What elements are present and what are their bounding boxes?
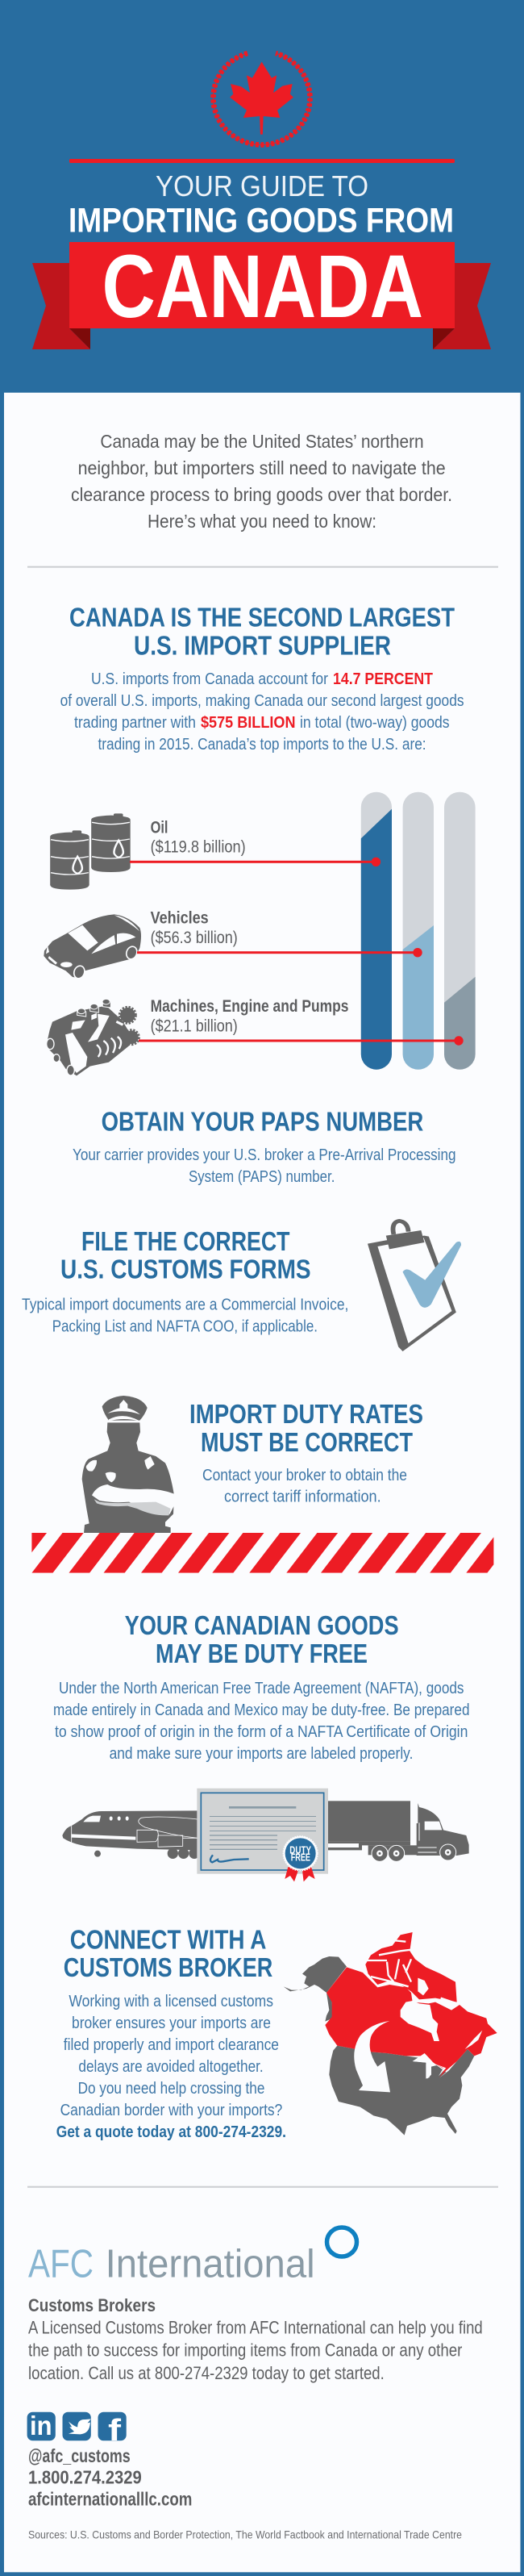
heading: customs forms bbox=[60, 1227, 311, 1285]
text block: introduction: neighbor, but importers still need to navigate the bbox=[78, 457, 446, 478]
panel: header bbox=[32, 53, 491, 349]
panel: duty rates bbox=[31, 1396, 493, 1573]
panel: customs forms bbox=[22, 1221, 461, 1351]
map: north america bbox=[284, 1932, 497, 2136]
heading: customs broker bbox=[64, 1925, 272, 1983]
leader line: vehicles bbox=[137, 948, 422, 957]
text block: introduction: clearance process to bring goods over that border. bbox=[71, 484, 452, 505]
label: machines bbox=[151, 997, 348, 1035]
text block: customs broker: Do you need help crossing the bbox=[78, 2079, 264, 2098]
icon: maple leaf with wreath bbox=[214, 53, 310, 144]
text block: customs broker: Canadian border with your imports? bbox=[60, 2101, 282, 2119]
panel: customs broker bbox=[56, 1925, 497, 2141]
hazard stripe band bbox=[31, 1533, 493, 1573]
text block: import statistics: in total (two-way) goods bbox=[300, 713, 450, 732]
text block: introduction: Canada may be the United States’ northern bbox=[100, 431, 424, 452]
red rule bbox=[69, 159, 455, 163]
text block: contact details: @afc_customs bbox=[28, 2445, 131, 2466]
text block: contact details: afcinternationalllc.com bbox=[28, 2489, 192, 2510]
text block: NAFTA bbox=[53, 1679, 469, 1763]
text block: customs broker: filed properly and import clearance bbox=[64, 2035, 279, 2054]
chart: top imports bars bbox=[44, 792, 476, 1075]
text block: introduction bbox=[71, 431, 452, 532]
heading: duty free bbox=[125, 1611, 399, 1669]
text block: import statistics: of overall U.S. imports, making Canada our second largest goods bbox=[60, 691, 464, 710]
text block: customs broker: delays are avoided altogether. bbox=[78, 2057, 264, 2076]
text block: customs forms: Packing List and NAFTA COO, if applicable. bbox=[52, 1317, 318, 1335]
icon: airplane bbox=[62, 1810, 200, 1859]
label: oil bbox=[151, 819, 246, 857]
text block: import statistics: U.S. imports from Canada account for bbox=[91, 670, 328, 688]
icon: linkedin: in bbox=[30, 2411, 52, 2440]
panel: footer bbox=[27, 2227, 483, 2541]
map: alaska bbox=[284, 1956, 347, 2022]
label: vehicles bbox=[151, 909, 238, 947]
text block: duty rates: correct tariff information. bbox=[224, 1488, 381, 1506]
leader line: machines bbox=[139, 1036, 464, 1046]
text block: import statistics: $575 BILLION bbox=[201, 713, 295, 732]
bar: machines bbox=[444, 792, 476, 1070]
logo: AFC International: International bbox=[106, 2243, 315, 2286]
text block: customs forms: Typical import documents are a Commercial Invoice, bbox=[22, 1295, 348, 1313]
icon: facebook: f bbox=[108, 2414, 121, 2448]
text block: customs broker: Get a quote today at 800-274-2329. bbox=[56, 2123, 286, 2141]
text block: NAFTA: to show proof of origin in the form of a NAFTA Certificate of Origin bbox=[55, 1722, 468, 1741]
text block: PAPS: System (PAPS) number. bbox=[189, 1167, 335, 1186]
text block: customs broker bbox=[56, 1992, 286, 2141]
heading: duty rates: IMPORT DUTY RATES bbox=[189, 1400, 423, 1430]
icon: customs officer bbox=[82, 1396, 176, 1533]
icon: facebook bbox=[98, 2412, 127, 2448]
text block: introduction: Here’s what you need to know: bbox=[148, 511, 376, 532]
text block: customs broker: broker ensures your imports are bbox=[72, 2014, 271, 2032]
icon: certificate with seal bbox=[197, 1789, 328, 1881]
text block: about: location. Call us at 800-274-2329 today to get started. bbox=[28, 2363, 385, 2383]
leader line: oil bbox=[130, 858, 381, 866]
icon: oil barrels bbox=[50, 813, 131, 890]
logo: AFC International: AFC bbox=[28, 2243, 94, 2286]
icon: truck bbox=[328, 1801, 469, 1861]
text block: import statistics bbox=[60, 670, 464, 754]
label: machines: Machines, Engine and Pumps bbox=[151, 997, 348, 1016]
map: canada bbox=[325, 1932, 497, 2079]
sources: Sources: U.S. Customs and Border Protection, The World Factbook and International Trade Centre bbox=[28, 2528, 462, 2541]
text block: import statistics: trading partner with bbox=[74, 713, 196, 732]
icon: car bbox=[44, 914, 141, 980]
panel: duty free bbox=[53, 1611, 469, 1881]
text block: customs forms bbox=[22, 1295, 348, 1335]
seal text bbox=[289, 1843, 311, 1864]
map: united states bbox=[329, 2046, 474, 2136]
text block: import statistics: 14.7 PERCENT bbox=[333, 670, 433, 688]
heading: PAPS: OBTAIN YOUR PAPS NUMBER bbox=[102, 1108, 423, 1138]
title: canada: CANADA bbox=[102, 237, 423, 336]
heading: duty free: MAY BE DUTY FREE bbox=[156, 1639, 368, 1669]
title: importing goods from: IMPORTING GOODS FROM bbox=[69, 201, 454, 240]
text block: about bbox=[28, 2295, 483, 2383]
label: oil: Oil bbox=[151, 819, 168, 837]
bar: oil bbox=[361, 792, 392, 1070]
text block: PAPS bbox=[73, 1146, 456, 1186]
heading: second largest supplier: U.S. IMPORT SUPPLIER bbox=[134, 632, 391, 662]
heading: customs broker: CONNECT WITH A bbox=[70, 1925, 266, 1955]
icon: clipboard with check bbox=[368, 1221, 461, 1351]
text block: import statistics: trading in 2015. Canada’s top imports to the U.S. are: bbox=[98, 735, 426, 754]
heading: duty free: YOUR CANADIAN GOODS bbox=[125, 1611, 399, 1641]
text block: contact details bbox=[28, 2445, 192, 2510]
ribbon banner bbox=[32, 237, 491, 349]
text block: about: Customs Brokers bbox=[28, 2295, 156, 2315]
label: machines: ($21.1 billion) bbox=[151, 1017, 238, 1035]
heading: customs broker: CUSTOMS BROKER bbox=[64, 1953, 272, 1983]
text block: PAPS: Your carrier provides your U.S. broker a Pre-Arrival Processing bbox=[73, 1146, 456, 1164]
label: vehicles: Vehicles bbox=[151, 909, 209, 928]
text block: about: the path to success for importing items from Canada or any other bbox=[28, 2340, 462, 2361]
label: vehicles: ($56.3 billion) bbox=[151, 929, 238, 947]
icon: engine bbox=[47, 999, 139, 1075]
text block: customs broker: Working with a licensed customs bbox=[69, 1992, 273, 2010]
seal text: FREE bbox=[291, 1852, 310, 1864]
text block: NAFTA: and make sure your imports are labeled properly. bbox=[110, 1744, 413, 1763]
text block: duty rates bbox=[202, 1466, 407, 1506]
text block: duty rates: Contact your broker to obtain the bbox=[202, 1466, 407, 1484]
arrow: crossing the border bbox=[354, 2021, 390, 2092]
seal text: DUTY bbox=[289, 1843, 311, 1856]
heading: duty rates bbox=[189, 1400, 423, 1458]
heading: duty rates: MUST BE CORRECT bbox=[201, 1428, 413, 1458]
title: your guide to: YOUR GUIDE TO bbox=[156, 169, 368, 202]
heading: customs forms: U.S. CUSTOMS FORMS bbox=[60, 1255, 311, 1285]
icon: twitter bbox=[63, 2412, 91, 2440]
heading: customs forms: FILE THE CORRECT bbox=[81, 1227, 290, 1257]
heading: second largest supplier bbox=[69, 603, 455, 662]
text block: contact details: 1.800.274.2329 bbox=[28, 2467, 142, 2488]
bar: vehicles bbox=[403, 792, 434, 1070]
logo: AFC International bbox=[28, 2227, 356, 2286]
panel: PAPS number bbox=[73, 1108, 456, 1186]
label: oil: ($119.8 billion) bbox=[151, 838, 246, 857]
